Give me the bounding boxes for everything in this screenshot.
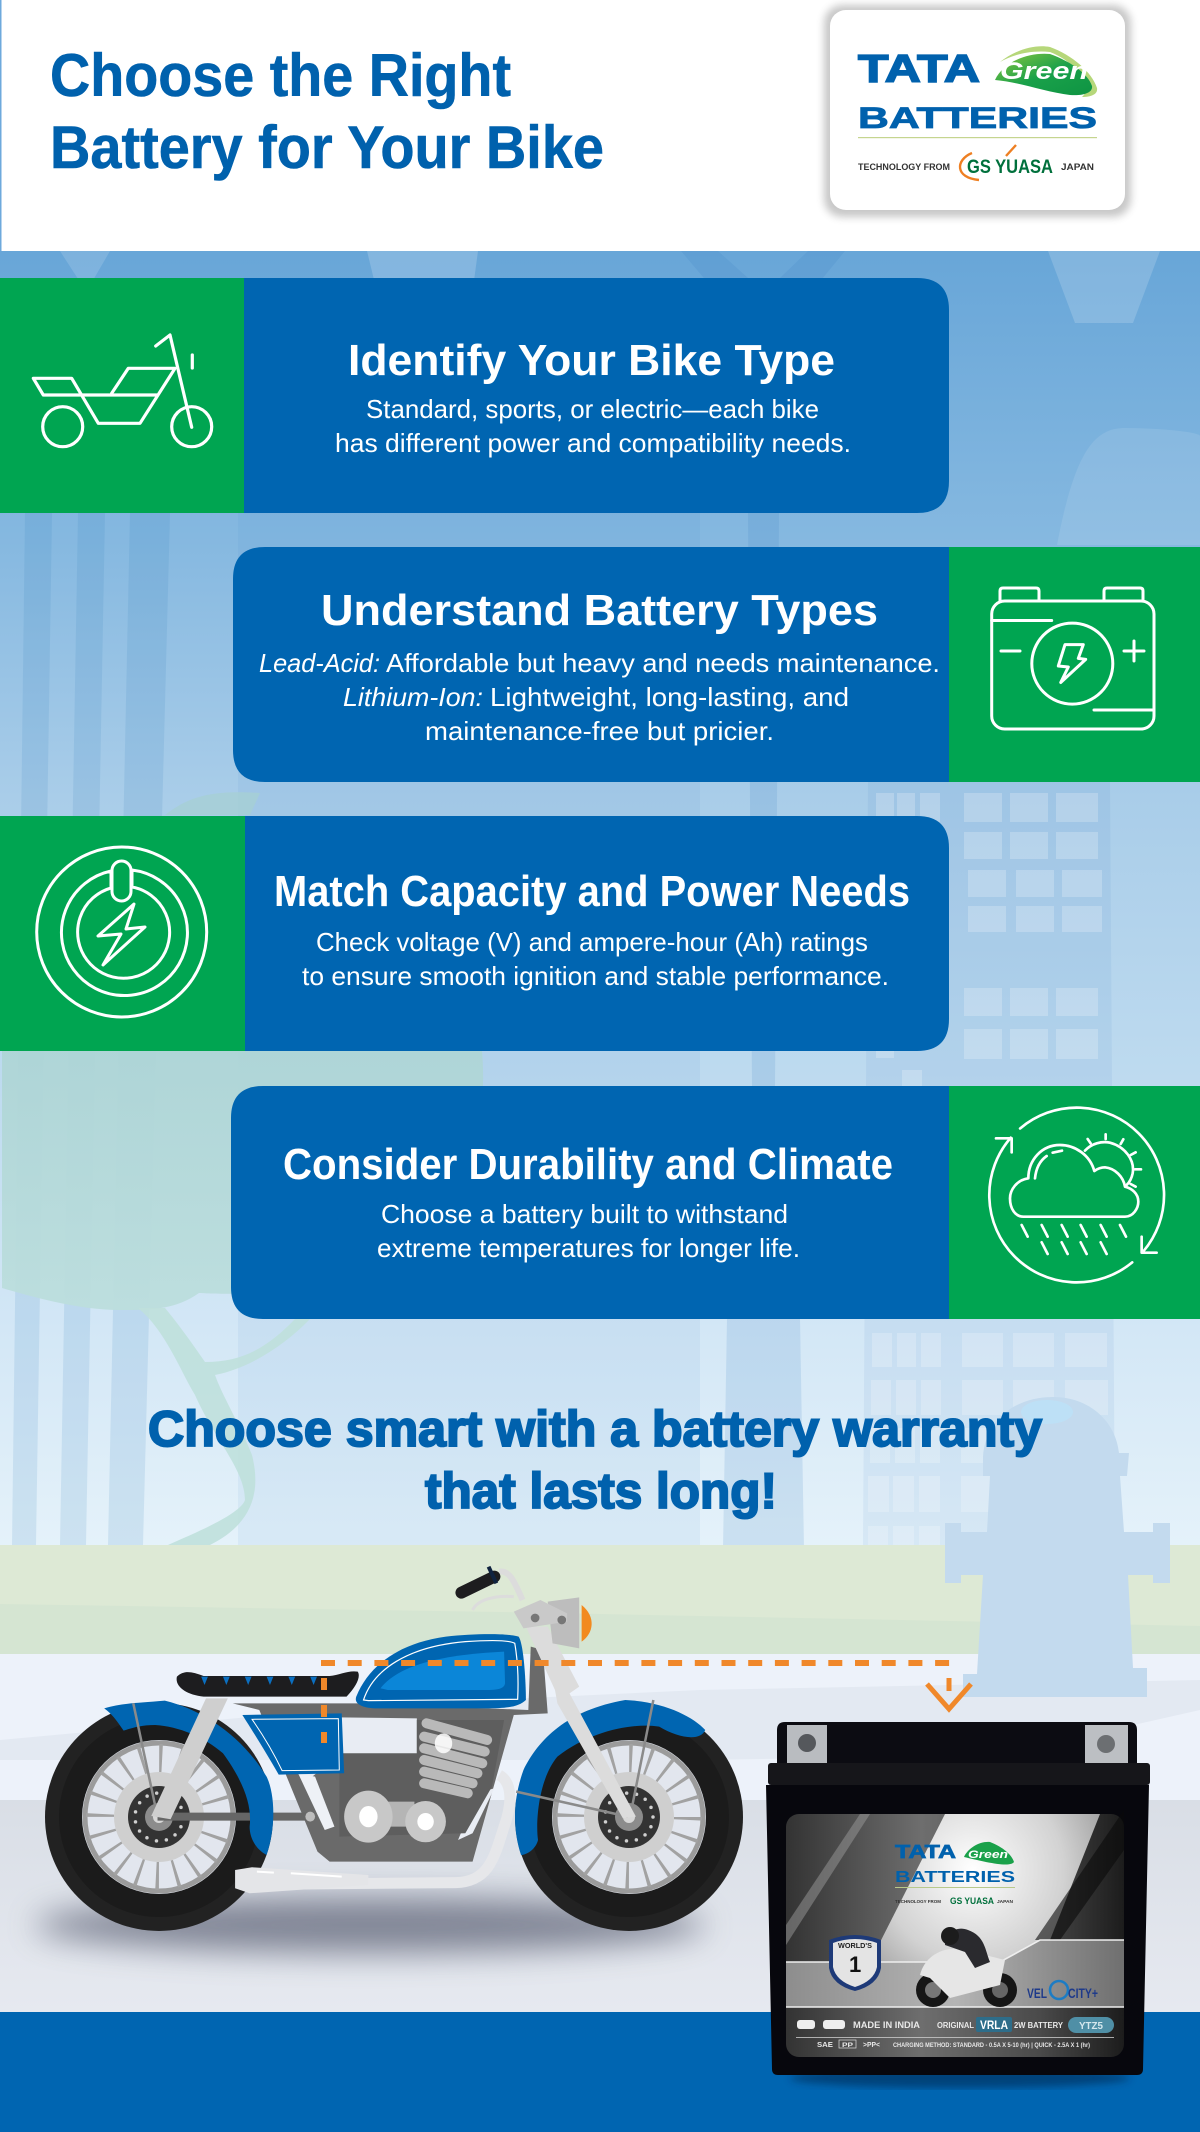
call to action headline: that lasts long! bbox=[425, 1463, 777, 1519]
battery label bbox=[786, 1810, 1124, 2057]
label bottom strip: ORIGINAL bbox=[937, 2021, 974, 2030]
exhaust bbox=[235, 1775, 510, 1893]
battery top housing bbox=[777, 1722, 1137, 1766]
panel: identify your bike type bbox=[0, 278, 949, 513]
label bottom strip: VRLA bbox=[980, 2018, 1008, 2032]
title: Battery for Your Bike bbox=[50, 114, 604, 181]
body text bbox=[259, 648, 940, 746]
logo: green swoosh: Green bbox=[1000, 58, 1088, 85]
rear wheel bbox=[45, 1703, 273, 1931]
battery body bbox=[766, 1785, 1149, 2075]
label bottom strip: SAE bbox=[817, 2042, 833, 2049]
label logo: TECHNOLOGY FROM bbox=[895, 1899, 941, 1904]
label logo bbox=[895, 1842, 1015, 1907]
handlebar bbox=[461, 1567, 523, 1610]
logo: technology from GS Yuasa: GS YUASA bbox=[967, 157, 1053, 178]
front fender bbox=[515, 1700, 705, 1855]
background: fire hydrant bbox=[945, 1397, 1170, 1697]
body text bbox=[335, 394, 851, 458]
bottom blue band bbox=[0, 2012, 1200, 2132]
logo: technology from GS Yuasa: TECHNOLOGY FROM bbox=[858, 162, 950, 172]
engine cooling fins bbox=[424, 1723, 487, 1793]
logo: Batteries wordmark: BATTERIES bbox=[858, 102, 1097, 135]
title: Choose the Right bbox=[50, 42, 511, 109]
frame and engine block bbox=[233, 1647, 548, 1862]
body text: Affordable but heavy and needs maintenance. bbox=[386, 648, 940, 678]
background: building with windows bbox=[863, 782, 1115, 1545]
body text: Check voltage (V) and ampere-hour (Ah) ratings bbox=[316, 927, 868, 957]
panel: match capacity and power needs bbox=[0, 816, 949, 1051]
logo: technology from GS Yuasa bbox=[858, 145, 1094, 180]
call to action headline: Choose smart with a battery warranty bbox=[148, 1401, 1042, 1457]
label logo: JAPAN bbox=[997, 1899, 1013, 1904]
panel: consider durability and climate bbox=[231, 1086, 1200, 1319]
body text: extreme temperatures for longer life. bbox=[377, 1233, 800, 1263]
battery bbox=[766, 1722, 1150, 2075]
front wheel bbox=[515, 1703, 743, 1931]
icon: weather cycle bbox=[989, 1108, 1164, 1282]
label bottom strip: PP bbox=[842, 2043, 853, 2049]
motorcycle illustration bbox=[35, 1567, 743, 1953]
label logo: Green bbox=[968, 1849, 1008, 1861]
body text: Standard, sports, or electric—each bike bbox=[366, 394, 819, 424]
label bottom strip bbox=[796, 2017, 1114, 2049]
heading: Match Capacity and Power Needs bbox=[274, 867, 910, 916]
seat bbox=[177, 1671, 359, 1697]
orange down arrow bbox=[927, 1678, 971, 1709]
logo: green swoosh bbox=[995, 46, 1097, 97]
shield badge: WORLD'S bbox=[838, 1943, 872, 1950]
logo: TATA wordmark: TATA bbox=[858, 48, 980, 91]
motorcycle body bbox=[104, 1567, 705, 1893]
swing arm bbox=[158, 1813, 310, 1821]
fuel tank bbox=[356, 1634, 526, 1708]
body text bbox=[302, 927, 889, 991]
label bottom strip: CHARGING METHOD: STANDARD - 0.5A X 5-10 (hr) | QUICK - 2.5A X 1 (hr) bbox=[893, 2042, 1090, 2049]
velocity logo bbox=[1027, 1981, 1098, 2001]
shield badge: 1 bbox=[849, 1952, 861, 1977]
velocity logo: CITY+ bbox=[1068, 1985, 1098, 2001]
label bottom strip: MADE IN INDIA bbox=[853, 2020, 921, 2030]
logo: rule bbox=[858, 137, 1097, 138]
body text: to ensure smooth ignition and stable performance. bbox=[302, 961, 889, 991]
icon: battery bbox=[992, 588, 1154, 729]
shield badge bbox=[829, 1935, 881, 1991]
panel: understand battery types bbox=[233, 547, 1200, 782]
body text: maintenance-free but pricier. bbox=[425, 716, 774, 746]
label logo: TATA bbox=[895, 1842, 956, 1862]
metal strip bbox=[786, 1940, 1124, 2007]
side panel bbox=[242, 1713, 344, 1775]
battery shadow bbox=[790, 2068, 1130, 2088]
battery lid bbox=[768, 1763, 1150, 1785]
rear fender bbox=[104, 1701, 273, 1855]
heading: Understand Battery Types bbox=[321, 586, 878, 635]
label logo: GS YUASA bbox=[950, 1896, 994, 1907]
label bottom strip: 2W BATTERY bbox=[1014, 2021, 1064, 2030]
logo card: Tata Green Batteries bbox=[824, 5, 1131, 217]
motorcycle ground shadow bbox=[35, 1897, 705, 1953]
engine cases bbox=[344, 1791, 446, 1843]
body text: Lightweight, long-lasting, and bbox=[490, 682, 849, 712]
headlight bbox=[514, 1597, 592, 1648]
icon: motorcycle bbox=[33, 335, 212, 447]
velocity logo: VEL bbox=[1027, 1985, 1047, 2001]
body text: Lead-Acid: bbox=[259, 648, 380, 678]
body text bbox=[377, 1199, 800, 1263]
header left edge line bbox=[0, 0, 2, 251]
heading: Identify Your Bike Type bbox=[348, 336, 835, 385]
ground: grass, pavement and road bbox=[0, 1545, 1200, 2012]
rear shock bbox=[151, 1698, 228, 1819]
heading: Consider Durability and Climate bbox=[283, 1140, 893, 1189]
label bottom strip: YTZ5 bbox=[1079, 2021, 1103, 2032]
background: tree bbox=[2, 792, 483, 1545]
racing bike photo bbox=[916, 1927, 1017, 2007]
front fork bbox=[526, 1627, 636, 1818]
call to action headline bbox=[148, 1401, 1042, 1519]
logo: technology from GS Yuasa: JAPAN bbox=[1061, 162, 1094, 172]
label logo: BATTERIES bbox=[895, 1869, 1015, 1886]
label bottom strip: >PP< bbox=[863, 2042, 880, 2049]
body text: Lithium-Ion: bbox=[343, 682, 483, 712]
battery terminals bbox=[787, 1725, 1128, 1763]
body text: Choose a battery built to withstand bbox=[381, 1199, 788, 1229]
title bbox=[50, 42, 604, 181]
icon: power button with bolt bbox=[37, 847, 207, 1017]
background cityscape bbox=[0, 251, 1200, 1697]
dashed orange guide line bbox=[321, 1663, 952, 1743]
body text: has different power and compatibility needs. bbox=[335, 428, 851, 458]
